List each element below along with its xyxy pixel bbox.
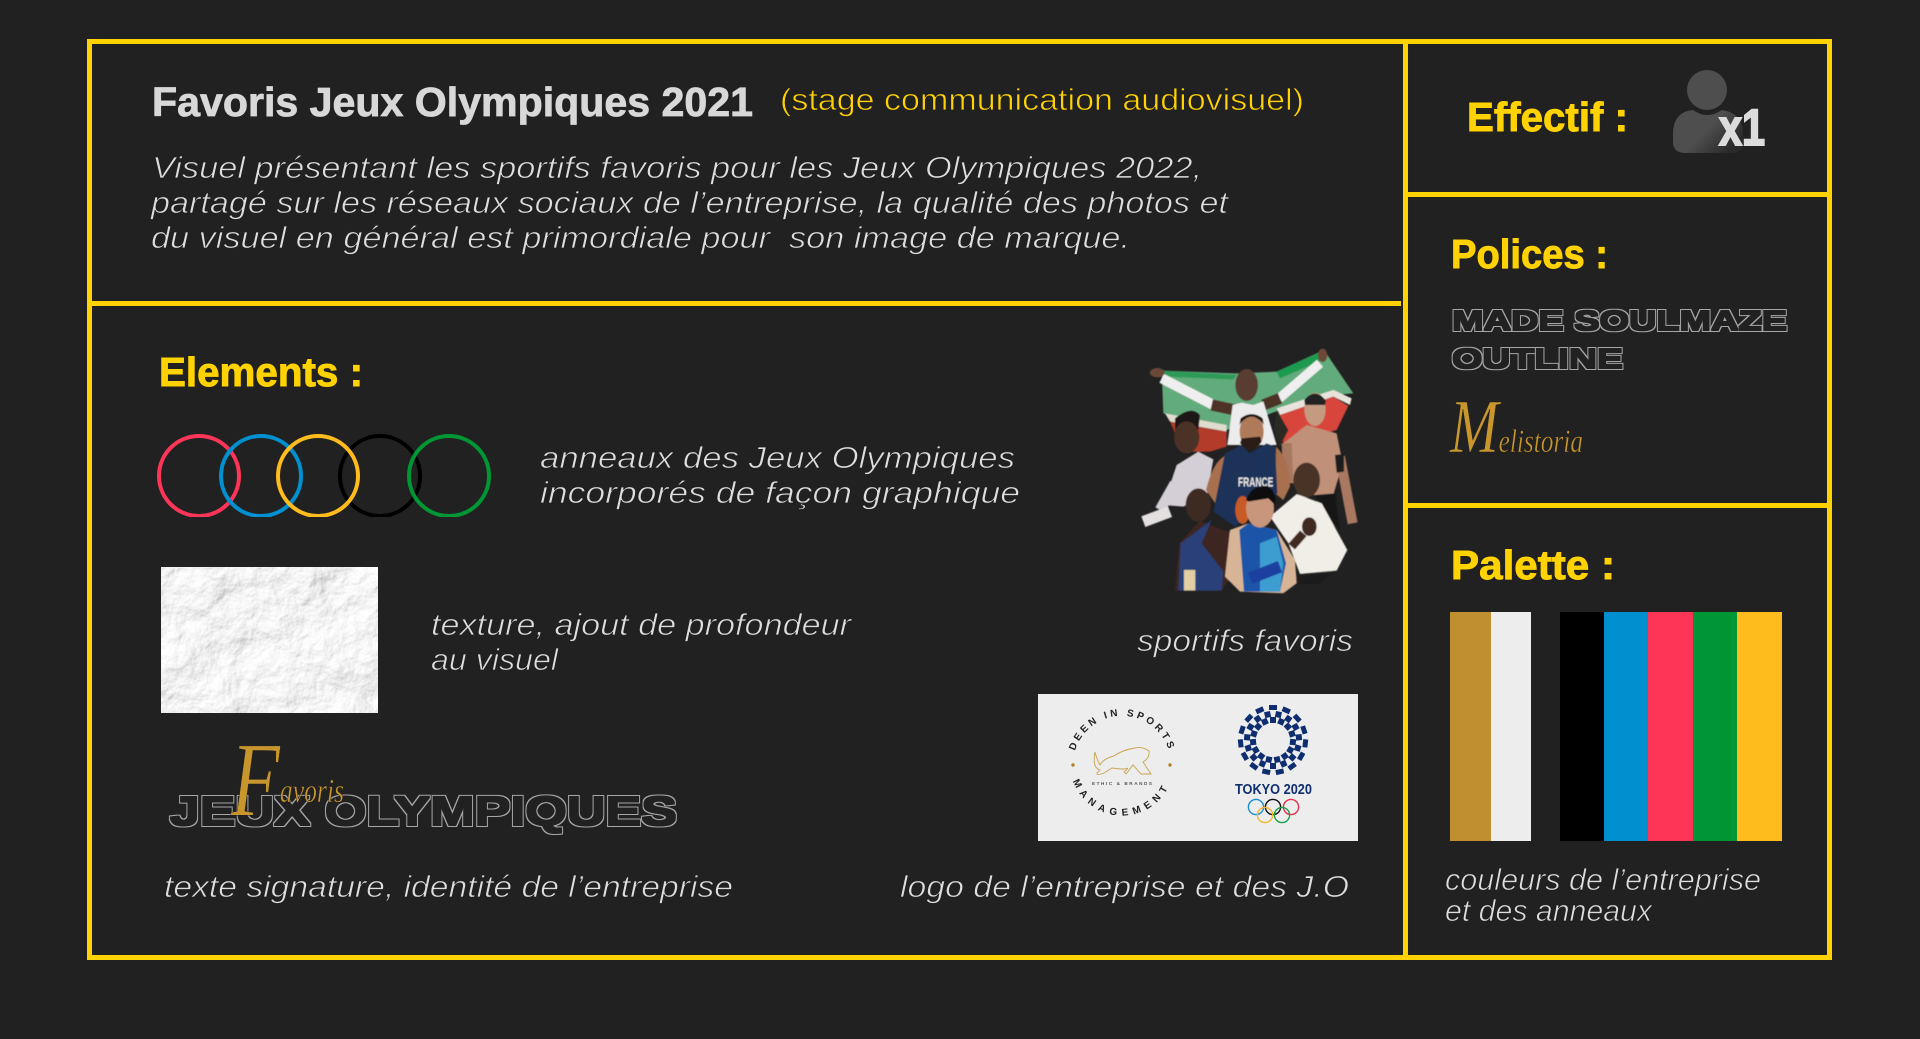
title: Favoris Jeux Olympiques 2021 [152,79,753,125]
logo: company: ETHIC & BRANDS [1092,781,1152,786]
panel: effectif [1408,44,1827,192]
description: partagé sur les réseaux sociaux de l’entreprise, la qualité des photos et [150,185,1230,220]
sprinter [1186,488,1211,522]
logos panel [1038,694,1358,841]
rings caption: incorporés de façon graphique [540,475,1020,510]
panel: polices [1408,197,1827,503]
signature text: F [230,721,281,838]
logo: company [1068,709,1174,816]
logos caption: logo de l’entreprise et des J.O [900,869,1349,904]
heading: polices: Polices : [1451,231,1608,277]
athletes photo collage [1143,349,1353,593]
description [150,150,1230,255]
panel: elements [157,348,1358,904]
boxer [1225,523,1297,593]
rings caption: anneaux des Jeux Olympiques [540,440,1015,475]
logo: company: MANAGEMENT [1073,778,1166,816]
judoka [1293,463,1320,497]
heading: palette: Palette : [1451,542,1615,588]
palette caption [1445,862,1761,928]
swatches: company [1450,612,1531,841]
font sample: outline: OUTLINE [1452,343,1623,374]
signature text: JEUX OLYMPIQUES [170,788,677,834]
logo: tokyo 2020: TOKYO 2020 [1235,782,1312,798]
rings caption [540,440,1020,510]
heading: effectif: Effectif : [1467,94,1628,140]
logo: company: DEEN IN SPORTS [1068,709,1174,750]
subtitle: (stage communication audiovisuel) [780,82,1304,117]
font sample: outline: MADE SOULMAZE [1452,305,1787,336]
athletes photo collage: FRANCE [1238,476,1273,490]
panel: palette [1408,508,1827,955]
texture caption: au visuel [431,642,559,677]
panel: header [92,44,1403,301]
signature caption: texte signature, identité de l’entreprise [164,869,733,904]
heading: elements: Elements : [159,349,363,395]
signature text: avoris [280,773,344,810]
signature text [170,721,677,838]
font sample: outline [1452,305,1787,374]
logo: tokyo 2020 [1235,705,1312,823]
palette caption: et des anneaux [1445,893,1653,928]
texture sample [161,567,378,713]
basketball player [1206,455,1235,510]
texture caption [431,607,853,677]
olympic rings [159,436,489,516]
gymnast [1175,411,1200,430]
icon: person [1673,70,1743,153]
texture caption: texture, ajout de profondeur [431,607,853,642]
swatches: rings [1560,612,1782,841]
description: du visuel en général est primordiale pour son image de marque. [151,220,1130,255]
palette caption: couleurs de l’entreprise [1445,862,1761,897]
font sample: script: Melistoria [1449,385,1583,469]
description: Visuel présentant les sportifs favoris pour les Jeux Olympiques 2022, [152,150,1202,185]
athletes caption: sportifs favoris [1137,623,1353,658]
swimmer [1304,393,1326,426]
multiplier: x1 [1719,99,1765,156]
